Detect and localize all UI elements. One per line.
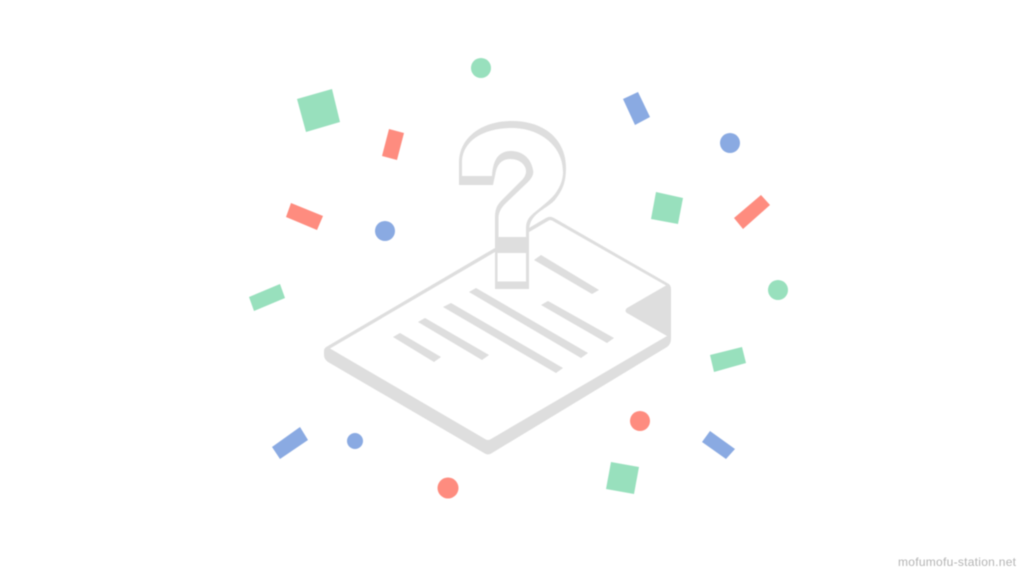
document text lines <box>393 255 614 373</box>
confetti: red shapes <box>286 129 770 498</box>
icon: document <box>324 217 671 454</box>
confetti: blue shapes <box>272 92 740 459</box>
watermark text: mofumofu-station.net <box>898 555 1017 569</box>
icon: question mark <box>459 121 566 289</box>
confetti: green shapes <box>249 58 788 494</box>
